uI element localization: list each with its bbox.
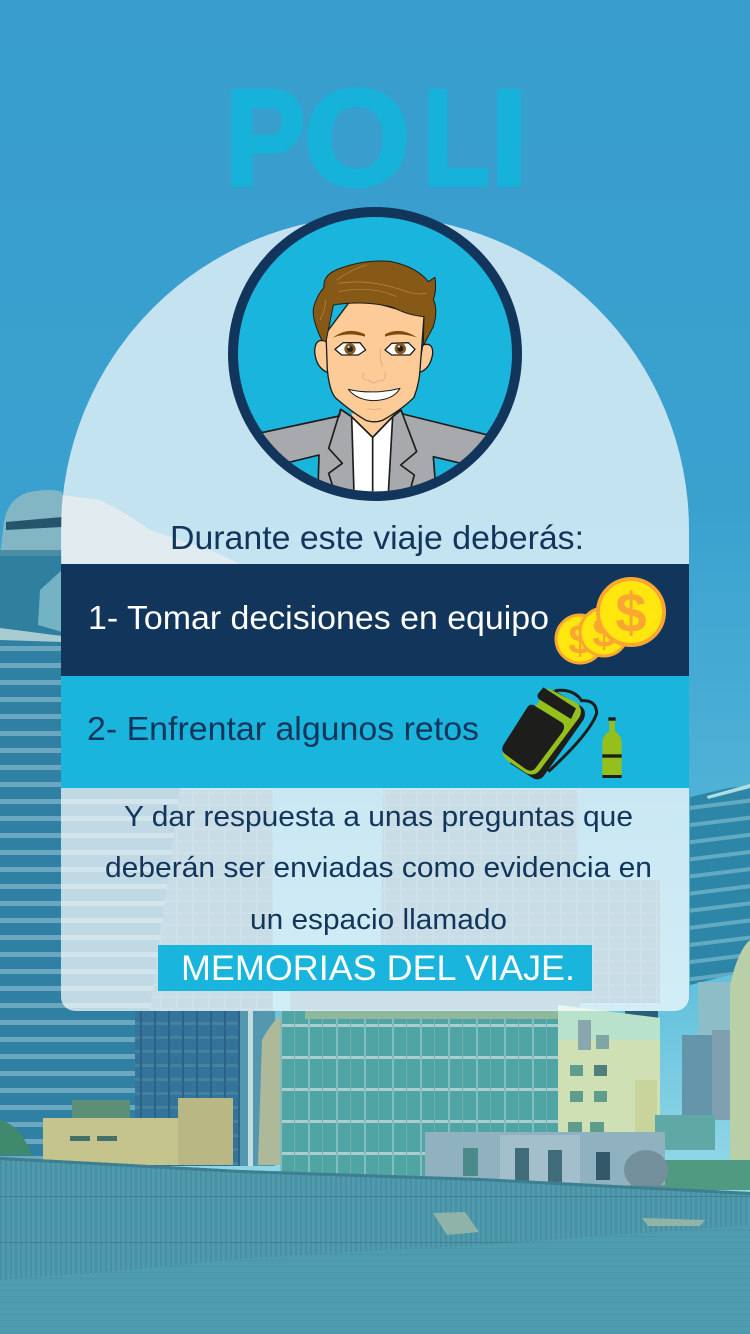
callout: memorias del viaje: MEMORIAS DEL VIAJE. [181,949,575,988]
intro text: Durante este viaje deberás: [170,519,584,556]
band 1: decisions [61,564,689,676]
face [326,297,424,422]
icon: backpack [502,687,597,779]
band 1 text: 1- Tomar decisiones en equipo [88,599,549,636]
left tower [0,490,240,1160]
panel: translucent arch card [61,216,689,1011]
eyebrows [333,331,417,338]
left ear [315,340,328,373]
lapels [329,409,417,493]
hair [313,261,436,346]
jacket [262,408,487,492]
icon: gold coins: $ [615,581,647,644]
nose [363,348,385,383]
paragraph: Y dar respuesta a unas preguntas que [124,801,633,833]
icon: gold coins: $ [592,609,616,656]
title: POLI: L [423,62,490,215]
left eye [335,343,366,355]
paragraph [105,801,652,936]
title: POLI: I [490,62,528,215]
beige building [0,1098,233,1165]
mid and right towers [135,783,750,1166]
gray building and vent [425,1132,750,1193]
avatar: man in gray suit inside circle [230,212,520,500]
icon: gold coins: $ [568,616,592,663]
title: POLI [225,62,528,215]
neck [352,413,393,437]
icon: gold coins [556,579,664,663]
shirt [352,417,393,493]
right eye [385,343,415,355]
band 2: challenges [61,676,689,788]
title: POLI: P [225,62,305,215]
smile [348,388,400,401]
jacket gaps [289,454,460,480]
hair highlights [320,265,427,320]
band 2 text: 2- Enfrentar algunos retos [87,710,479,747]
icon: bottle [602,717,622,778]
right ear [418,344,433,373]
paragraph: un espacio llamado [250,904,507,936]
corrugated roof [0,1157,750,1334]
title: POLI: O [304,62,411,215]
paragraph: deberán ser enviadas como evidencia en [105,852,652,884]
glass office building [258,1005,715,1176]
